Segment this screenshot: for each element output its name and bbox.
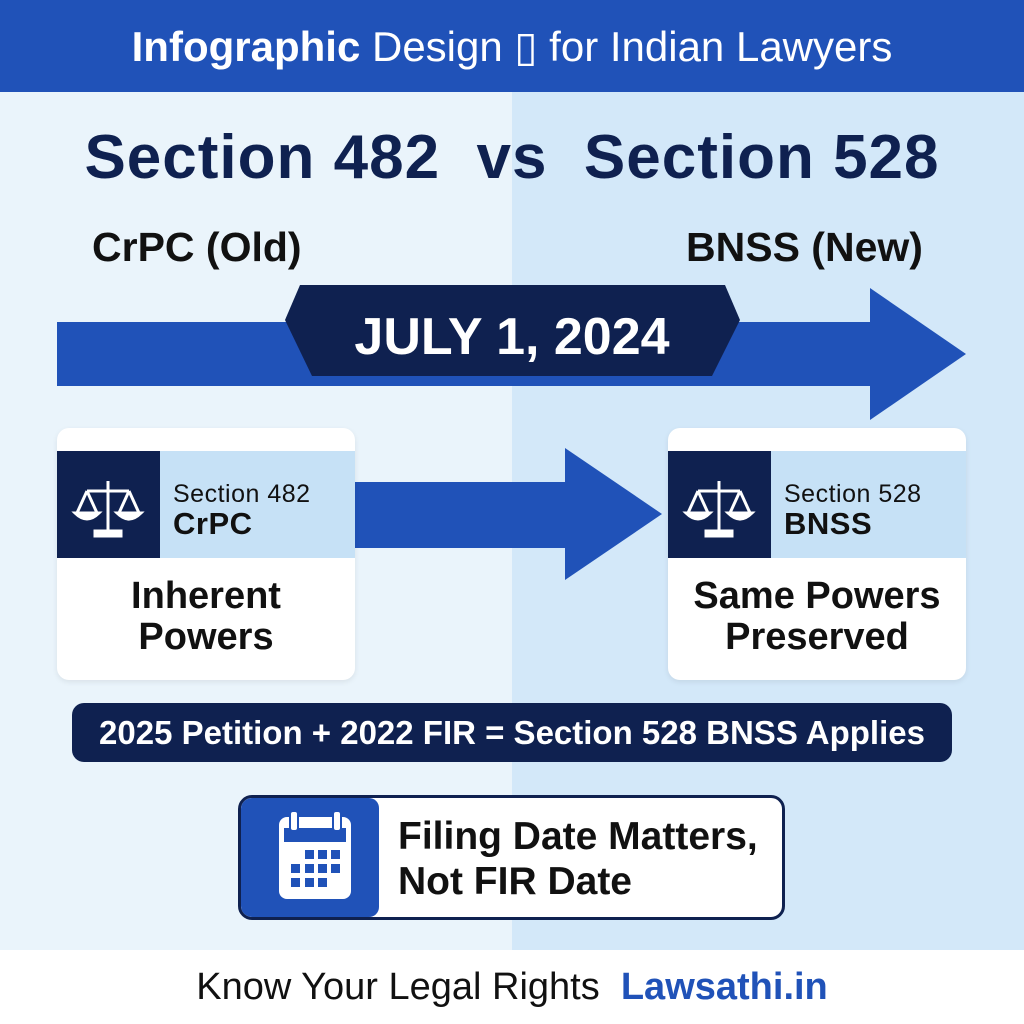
panel: left card: Section 482 bbox=[173, 480, 311, 508]
callout text bbox=[398, 815, 758, 903]
callout bbox=[238, 795, 785, 920]
icon: scales bbox=[668, 451, 771, 558]
panel: right card: Same Powers bbox=[693, 575, 941, 617]
label: CrPC: CrPC (Old) bbox=[92, 224, 302, 270]
date badge: JULY 1, 2024 bbox=[354, 308, 670, 366]
title: Section 482 vs Section 528 bbox=[84, 123, 940, 192]
panel: right card: BNSS bbox=[784, 506, 872, 541]
callout text: Not FIR Date bbox=[398, 860, 632, 903]
footer bbox=[0, 950, 1024, 1024]
panel: right card: Section 528 bbox=[784, 480, 922, 508]
arrow: timeline bbox=[57, 285, 966, 420]
panel: left card: Inherent bbox=[131, 575, 281, 617]
equation pill: 2025 Petition + 2022 FIR = Section 528 BNSS Applies bbox=[99, 714, 925, 751]
callout text: Filing Date Matters, bbox=[398, 815, 758, 858]
label: BNSS: BNSS (New) bbox=[686, 224, 923, 270]
panel: left card bbox=[57, 428, 355, 680]
equation pill bbox=[72, 703, 952, 762]
header bbox=[0, 0, 1024, 92]
icon: calendar bbox=[241, 798, 379, 917]
icon: scales bbox=[57, 451, 160, 558]
panel: right card bbox=[668, 428, 966, 680]
arrow: middle bbox=[355, 448, 662, 580]
panel: left card: Powers bbox=[138, 616, 274, 658]
footer: Know Your Legal Rights Lawsathi.in bbox=[196, 966, 828, 1008]
panel: left card: CrPC bbox=[173, 506, 253, 541]
panel: right card: Preserved bbox=[725, 616, 909, 658]
header: Infographic Design ▯ for Indian Lawyers bbox=[132, 23, 892, 70]
